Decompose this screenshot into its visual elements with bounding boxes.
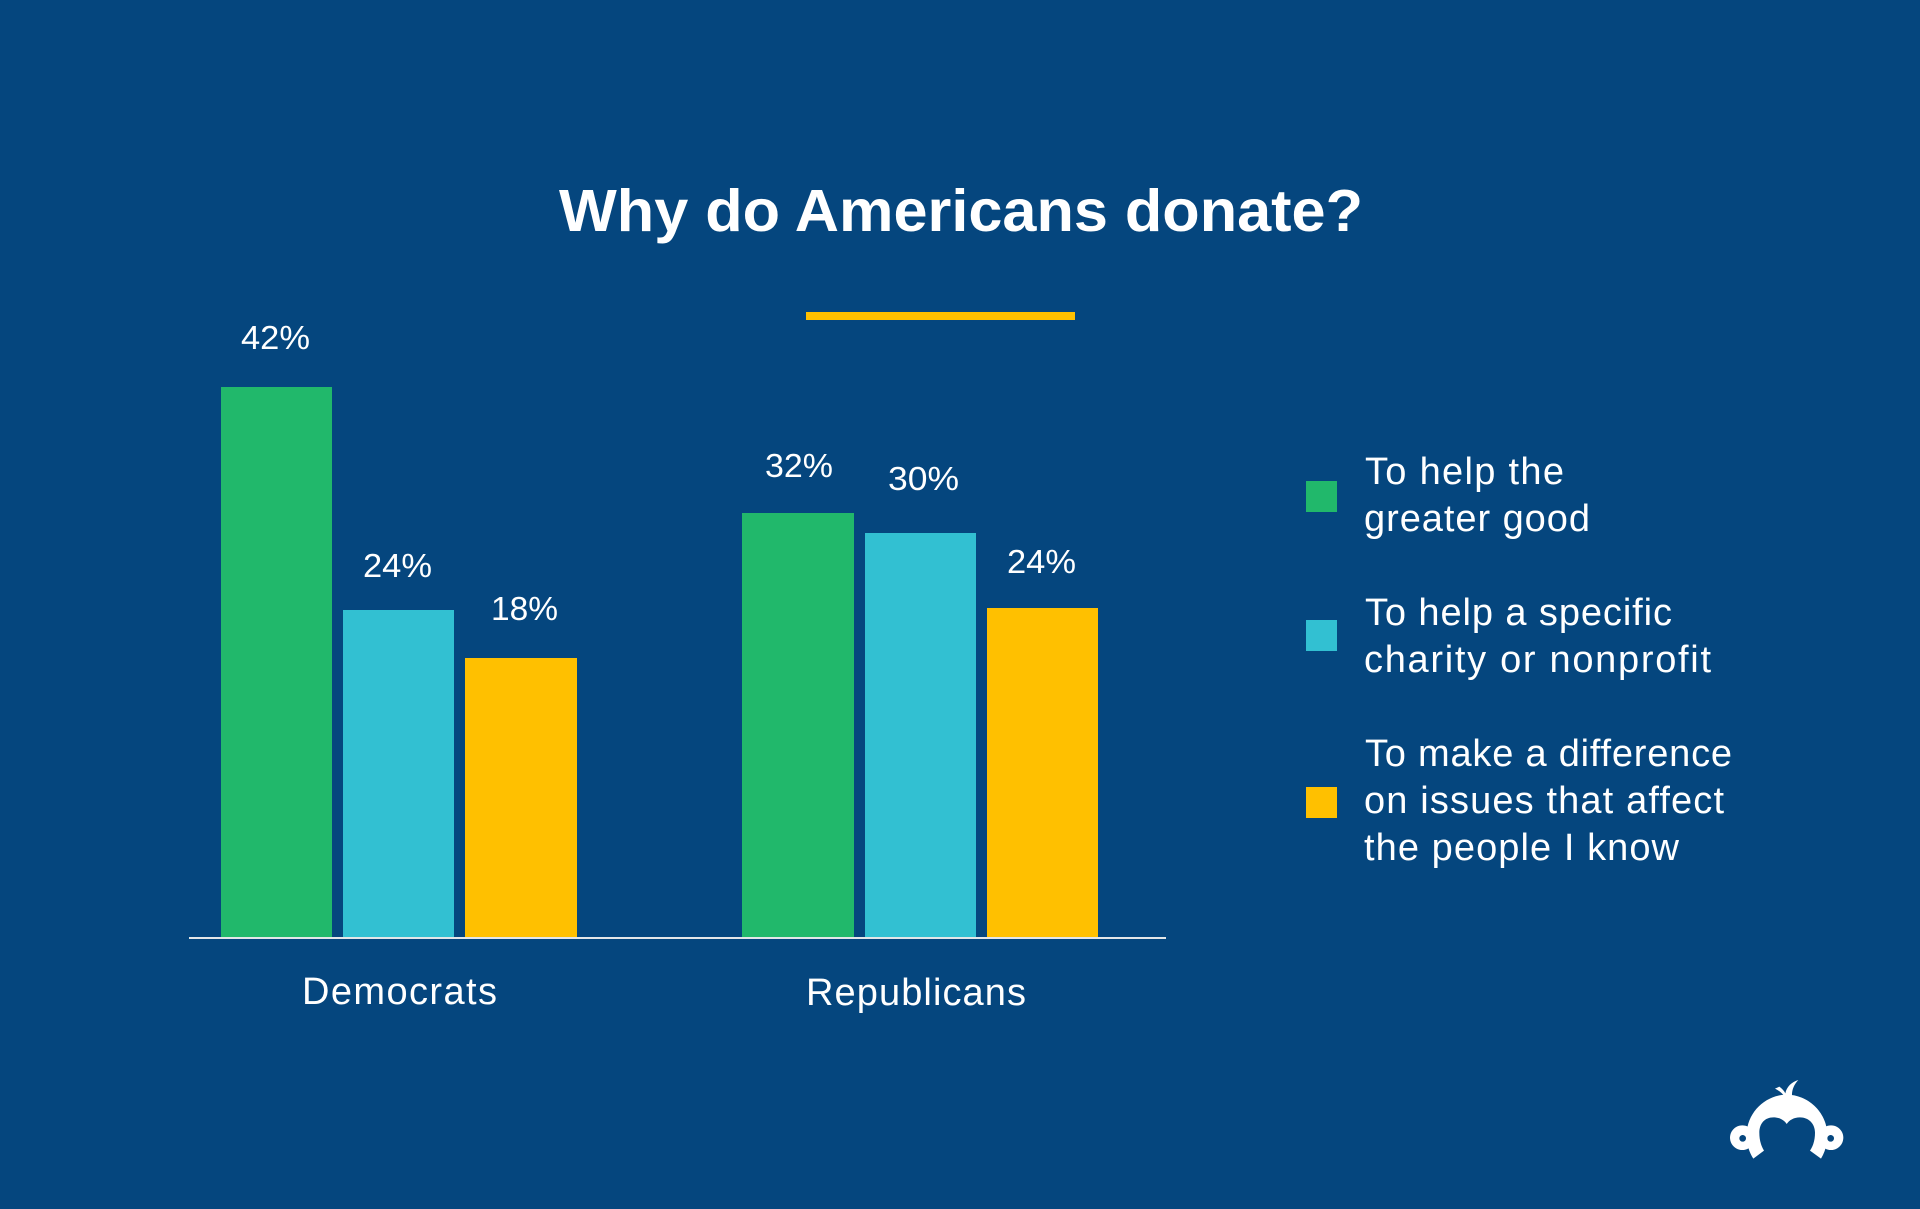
bar: Republicans specific charity 30%: 30% xyxy=(888,460,959,497)
legend item: greater good xyxy=(1306,451,1590,540)
legend item: greater good: greater good xyxy=(1364,498,1590,540)
bar: Republicans specific charity 30% xyxy=(865,460,976,937)
legend item: people I know: To make a difference xyxy=(1365,733,1732,775)
bar: Republicans people I know 24%: 24% xyxy=(1007,543,1076,580)
legend item: greater good: To help the xyxy=(1365,451,1564,493)
legend item: specific charity: To help a specific xyxy=(1365,592,1672,634)
bar: Democrats greater good 42%: 42% xyxy=(241,319,310,356)
axis label: Democrats: Democrats xyxy=(302,971,497,1013)
group: Republicans xyxy=(742,447,1098,1014)
legend item: specific charity: charity or nonprofit xyxy=(1364,639,1711,681)
chart baseline xyxy=(189,937,1166,939)
bar: Republicans greater good 32% xyxy=(742,447,854,937)
bar: Democrats greater good 42% xyxy=(221,319,332,937)
legend item: people I know xyxy=(1306,733,1732,869)
bar: Democrats people I know 18%: 18% xyxy=(491,590,558,627)
legend item: people I know: on issues that affect xyxy=(1364,780,1724,822)
legend xyxy=(1306,451,1732,869)
icon: monkey logo xyxy=(1730,1080,1843,1159)
axis label: Republicans: Republicans xyxy=(806,972,1026,1014)
legend item: people I know: the people I know xyxy=(1364,827,1680,869)
group: Democrats xyxy=(221,319,577,1013)
bar: Democrats specific charity 24%: 24% xyxy=(363,547,432,584)
bar: Republicans greater good 32%: 32% xyxy=(765,447,833,484)
legend item: specific charity xyxy=(1306,592,1711,681)
bar: Democrats specific charity 24% xyxy=(343,547,454,937)
title underline xyxy=(806,312,1075,320)
bar: Democrats people I know 18% xyxy=(465,590,577,937)
title: Why do Americans donate? xyxy=(559,178,1363,244)
bar: Republicans people I know 24% xyxy=(987,543,1098,937)
bar chart xyxy=(189,319,1166,1014)
